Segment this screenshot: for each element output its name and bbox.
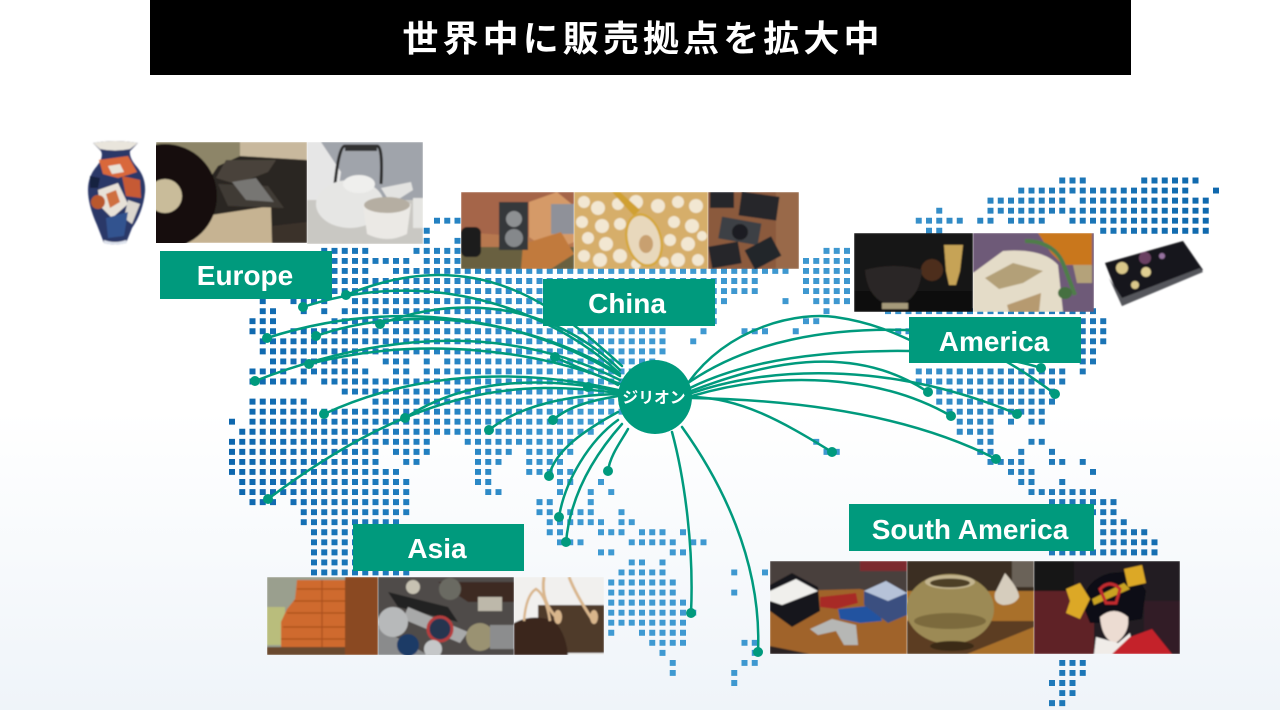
photo: vintage cameras bbox=[708, 192, 799, 269]
label: Europe bbox=[160, 251, 332, 299]
photo: monogram bags bbox=[514, 577, 604, 655]
photo: embroidered pouch bbox=[973, 233, 1094, 312]
photo: geisha doll bbox=[1034, 561, 1180, 654]
photo: lacquer box bbox=[1105, 241, 1203, 306]
hub: ジリオン bbox=[618, 360, 692, 434]
title banner: 世界中に販売拠点を拡大中 bbox=[402, 18, 884, 59]
line end points bbox=[250, 290, 1060, 657]
hub: ジリオン: ジリオン bbox=[622, 389, 686, 407]
connection lines from hub bbox=[255, 275, 1055, 652]
title banner bbox=[150, 0, 1131, 75]
photo: game controllers bbox=[770, 561, 907, 654]
label: South America bbox=[849, 504, 1094, 551]
label: China: China bbox=[588, 288, 666, 319]
photo: wrist watches bbox=[378, 577, 514, 655]
label: Europe: Europe bbox=[197, 260, 293, 291]
label: America bbox=[909, 317, 1081, 363]
photo: twin-lens camera bbox=[461, 192, 574, 269]
photo: pearls and pendant bbox=[574, 192, 708, 269]
photo: orange boxes bbox=[267, 577, 378, 655]
photo: vinyl record bbox=[156, 142, 307, 243]
label: America: America bbox=[939, 326, 1050, 357]
label: Asia bbox=[353, 524, 524, 571]
label: China bbox=[543, 279, 715, 326]
photo: tea bowl and whisk bbox=[854, 233, 973, 312]
label: South America: South America bbox=[872, 514, 1069, 545]
photo: white teapot bbox=[307, 142, 423, 244]
photo: Imari vase bbox=[88, 141, 145, 244]
photo: ceramic pot bbox=[907, 561, 1034, 654]
label: Asia: Asia bbox=[407, 533, 467, 564]
dotted world map bbox=[229, 181, 1219, 703]
